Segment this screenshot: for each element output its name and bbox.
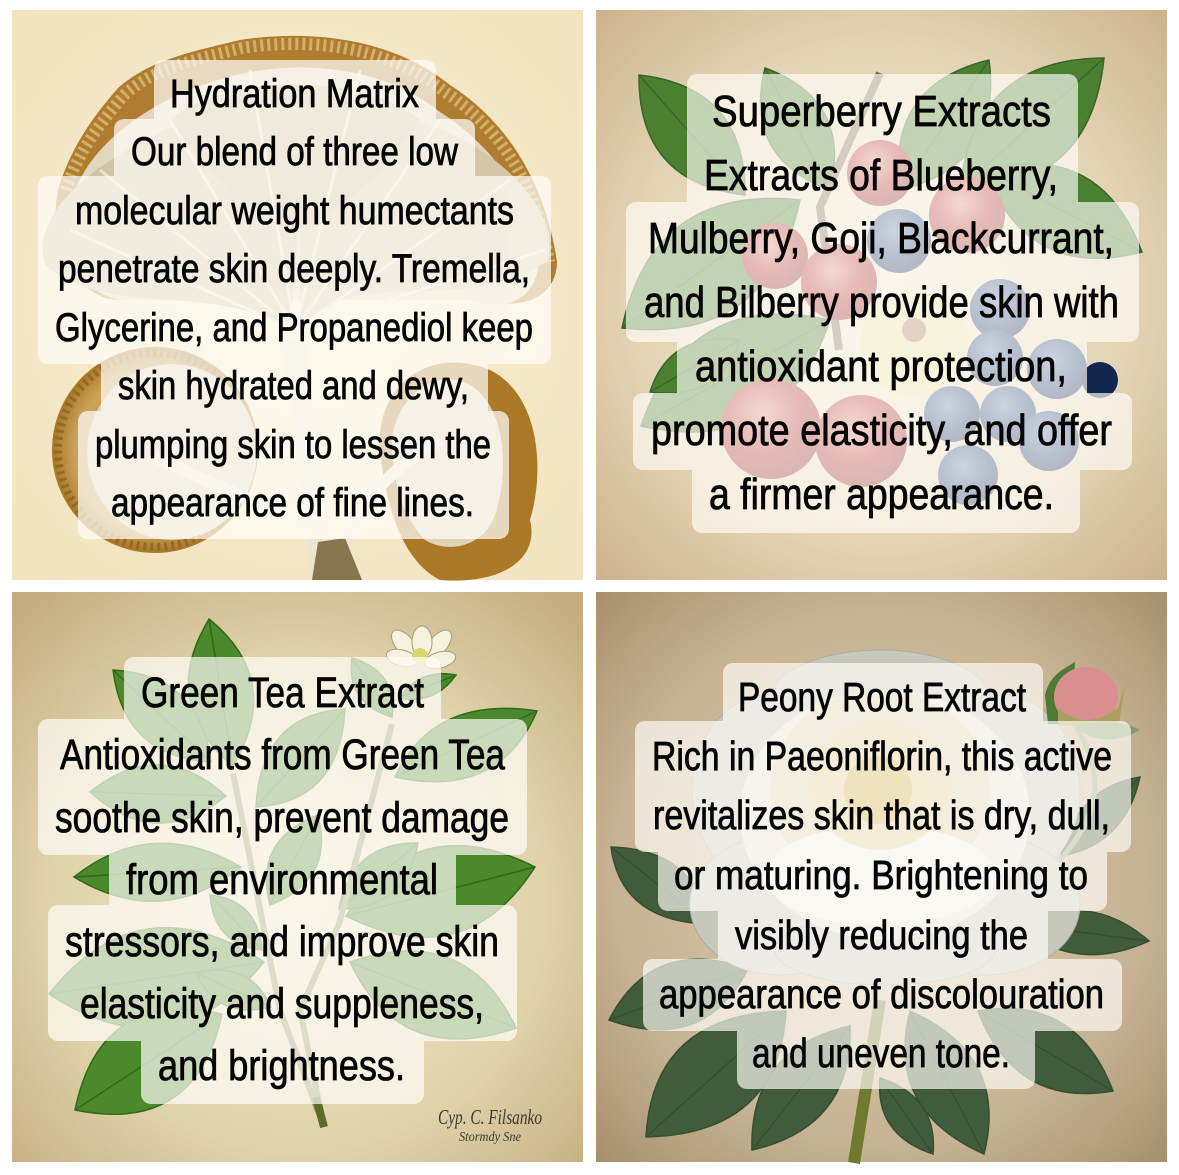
body text: appearance of fine lines. xyxy=(111,481,474,525)
illustration: berries and leaves xyxy=(622,58,1142,505)
signature: Cyp. C. Filsanko xyxy=(438,1105,542,1129)
body text: penetrate skin deeply. Tremella, xyxy=(58,247,530,291)
body text: molecular weight humectants xyxy=(75,189,514,233)
body text: visibly reducing the xyxy=(735,912,1028,958)
panel: superberry extracts xyxy=(596,10,1167,580)
body text xyxy=(55,732,509,1090)
signature xyxy=(438,1105,542,1145)
body text xyxy=(652,733,1112,1076)
panel background xyxy=(596,10,1167,580)
body text: promote elasticity, and offer xyxy=(651,406,1112,455)
body text: Extracts of Blueberry, xyxy=(704,151,1058,200)
body text: Our blend of three low xyxy=(131,130,458,174)
body text: elasticity and suppleness, xyxy=(80,981,484,1028)
body text: antioxidant protection, xyxy=(695,342,1067,391)
panel background xyxy=(12,10,583,580)
heading: Peony Root Extract xyxy=(738,674,1026,720)
signature: Stormdy Sne xyxy=(459,1130,521,1145)
tea flower centre xyxy=(412,648,428,664)
panel: green tea extract xyxy=(12,592,583,1162)
body text: and uneven tone. xyxy=(752,1030,1010,1076)
text highlight backing xyxy=(626,74,1139,533)
body text xyxy=(644,151,1119,519)
illustration: white peony xyxy=(609,650,1149,1163)
body text: and brightness. xyxy=(158,1043,405,1090)
body text: Antioxidants from Green Tea xyxy=(60,732,505,779)
panel background xyxy=(596,592,1167,1162)
heading: Green Tea Extract xyxy=(141,670,424,717)
panel: peony root extract xyxy=(596,592,1167,1163)
body text: Glycerine, and Propanediol keep xyxy=(55,306,533,350)
heading: Hydration Matrix xyxy=(170,72,419,116)
body text: appearance of discolouration xyxy=(659,971,1104,1017)
body text: skin hydrated and dewy, xyxy=(118,364,469,408)
text highlight backing xyxy=(635,663,1131,1089)
panel background xyxy=(12,592,583,1162)
body text: plumping skin to lessen the xyxy=(95,423,491,467)
text highlight backing xyxy=(38,60,551,539)
body text: stressors, and improve skin xyxy=(65,919,499,966)
text highlight backing xyxy=(38,657,527,1104)
body text xyxy=(55,130,533,525)
illustration: tea branch xyxy=(49,619,537,1127)
body text: or maturing. Brightening to xyxy=(674,852,1088,898)
body text: a firmer appearance. xyxy=(709,470,1054,519)
panel: hydration matrix xyxy=(12,10,583,581)
body text: from environmental xyxy=(126,857,438,904)
body text: soothe skin, prevent damage xyxy=(55,795,509,842)
heading: Superberry Extracts xyxy=(712,87,1051,136)
illustration: pale mushroom tree xyxy=(43,36,557,581)
